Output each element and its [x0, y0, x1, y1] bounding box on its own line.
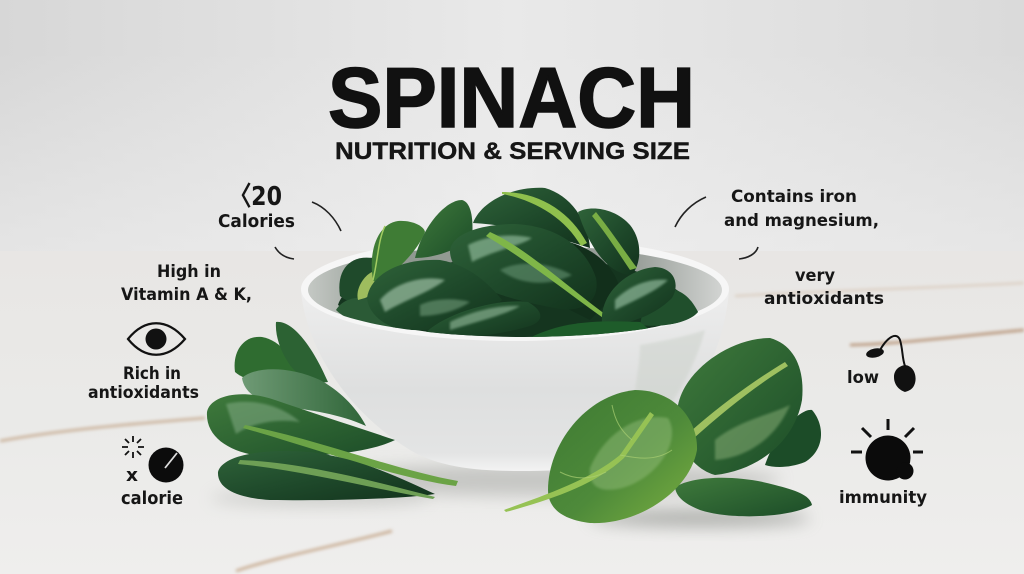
- text: calorie: calorie: [121, 489, 183, 509]
- callout arc: [739, 247, 758, 259]
- callout arc: [675, 197, 706, 227]
- text: rich in antioxidants: Rich in: [123, 364, 181, 384]
- text: vitamins: High in: [157, 262, 221, 282]
- spinach bowl: [301, 188, 729, 471]
- background wall: [0, 0, 1024, 252]
- calories label: Calories: [218, 211, 295, 232]
- title: SPINACH: [328, 51, 695, 146]
- icon: seed sprout: [865, 336, 916, 392]
- leaf: [276, 322, 328, 383]
- text: low: low: [847, 368, 879, 388]
- callout arc: [275, 247, 294, 259]
- calories value: 〈20: [229, 182, 282, 212]
- front leaf: [423, 301, 540, 338]
- right leaf group: [504, 338, 821, 523]
- right leaf: [602, 267, 676, 325]
- icon: sparkle: [122, 436, 144, 458]
- leaf: [242, 369, 366, 426]
- lower leaf: [675, 478, 812, 516]
- text: iron and magnesium: [724, 187, 879, 231]
- front leaf: [548, 390, 697, 523]
- text: very antioxidants: very: [795, 266, 835, 286]
- leaf: [235, 337, 300, 383]
- text: very antioxidants: antioxidants: [764, 289, 884, 309]
- text: rich in antioxidants: antioxidants: [88, 383, 199, 403]
- left leaf: [367, 260, 502, 330]
- text: vitamins: Vitamin A & K,: [121, 285, 252, 305]
- bowl leaves: [336, 188, 698, 341]
- stem: [504, 412, 654, 512]
- centre leaf: [450, 224, 597, 309]
- leaf: [207, 394, 395, 457]
- callout: calories: [218, 182, 295, 232]
- stem: [243, 425, 458, 486]
- marble table: [0, 251, 1024, 574]
- text: x: x: [126, 465, 138, 486]
- large leaf: [677, 338, 803, 475]
- text: rich in antioxidants: [88, 364, 199, 403]
- text: iron and magnesium: Contains iron: [731, 187, 857, 207]
- left leaf pile: [207, 322, 458, 500]
- bowl reflections: [632, 330, 705, 440]
- dark back leaf: [765, 410, 821, 467]
- leaf: [218, 451, 435, 500]
- text: very antioxidants: [764, 266, 884, 309]
- callout arc: [312, 202, 341, 231]
- text: vitamins: [121, 262, 252, 305]
- icon: sun: [851, 419, 923, 480]
- text: immunity: immunity: [839, 488, 927, 508]
- bowl interior: [308, 245, 722, 335]
- icon: dial: [148, 448, 184, 482]
- icon: eye: [128, 323, 185, 355]
- text: iron and magnesium: and magnesium,: [724, 211, 879, 231]
- subtitle: NUTRITION & SERVING SIZE: [335, 138, 690, 165]
- dark leaf mass: [338, 258, 698, 338]
- bowl body: [301, 290, 729, 471]
- bowl rim: [301, 237, 729, 341]
